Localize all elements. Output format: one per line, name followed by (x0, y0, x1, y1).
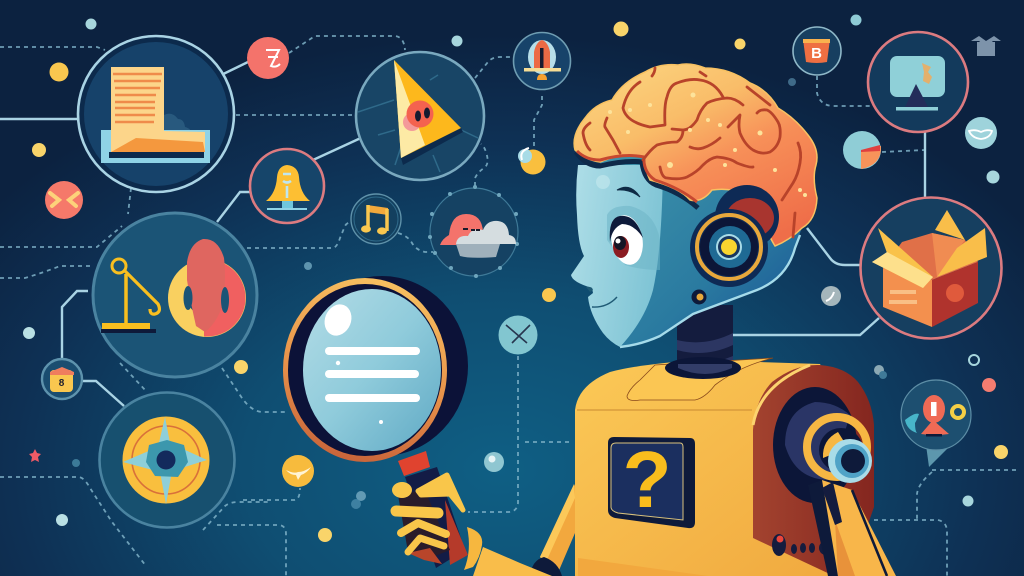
lens (828, 439, 872, 483)
eye socket (607, 206, 660, 270)
eye (607, 213, 647, 267)
icon: bubble (484, 452, 504, 472)
robot ear (690, 185, 779, 287)
eyebrow (617, 187, 640, 197)
icon: mask badge (965, 117, 997, 149)
control dots (772, 534, 833, 556)
shoulder joint (773, 387, 857, 503)
robot body (575, 357, 874, 576)
mouth (592, 297, 617, 307)
panel: scale and ring circle (93, 213, 257, 377)
icon: music note badge (351, 194, 401, 244)
icon: pie chart badge (843, 131, 881, 169)
robot right arm (808, 480, 896, 576)
chest panel with question mark: ? (623, 435, 671, 524)
icon: B badge (793, 27, 841, 75)
icon: yellow swoosh dot (518, 148, 546, 174)
body side panel (753, 365, 874, 576)
icon: open box circle (860, 198, 1002, 338)
panel: cloud circle (428, 185, 519, 278)
back of head (600, 150, 801, 347)
collar plate (627, 358, 773, 400)
icon: coral math badge (247, 37, 289, 79)
icon: B badge: B (811, 45, 822, 62)
robot hand (392, 475, 552, 576)
chest panel with question mark (608, 435, 695, 528)
magnifying glass (283, 276, 468, 462)
lens text lines (325, 347, 420, 402)
panel: triangle circle (356, 52, 484, 180)
panel: bell circle (250, 149, 324, 223)
forehead highlight (596, 175, 610, 189)
icon: yellow bird badge (282, 455, 314, 487)
icon: lamp badge (514, 32, 570, 90)
robot neck (677, 305, 733, 377)
neck bolt (692, 290, 706, 304)
icon: scissors badge (498, 316, 538, 354)
panel: monitor circle (868, 32, 968, 132)
robot brain (574, 64, 817, 246)
solid connector lines (0, 62, 925, 406)
icon: coral bones badge (45, 181, 83, 219)
icon: padlock badge: 8 (59, 378, 65, 389)
nose shadow (586, 287, 593, 292)
panel: compass circle (100, 392, 234, 528)
robot left arm (530, 484, 575, 576)
panel: document circle (78, 36, 234, 192)
robot head (571, 150, 801, 347)
icon: package top right (971, 36, 1001, 56)
magnifier handle (398, 451, 468, 568)
face front (571, 165, 663, 347)
icon: padlock badge (42, 359, 82, 399)
body lower seam and skirt (578, 558, 708, 576)
icon: location pin circle (901, 380, 971, 467)
icon: grey tick badge (821, 286, 841, 306)
